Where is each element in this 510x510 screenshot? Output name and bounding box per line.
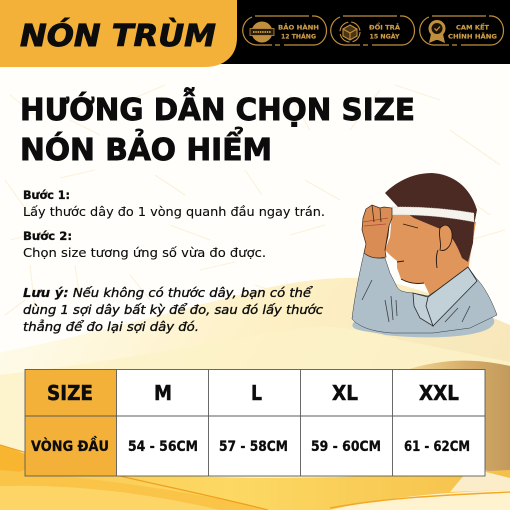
measuring tape — [392, 207, 474, 222]
row 2 labels: 57 - 58CM — [219, 439, 288, 455]
sleeve and shirt — [352, 253, 497, 333]
text block: step 1: Lấy thước dây đo 1 vòng quanh đầu ngay trán. — [23, 204, 325, 219]
row 1 labels: XL — [332, 381, 358, 405]
shirt shadow — [352, 316, 494, 337]
face lines — [397, 224, 438, 284]
text block: step 2: Bước 2: — [23, 229, 72, 243]
title: HƯỚNG DẪN CHỌN SIZE — [20, 87, 415, 128]
row 2 labels: 61 - 62CM — [404, 439, 470, 455]
logo panel — [0, 0, 237, 67]
illustration: man measuring head — [352, 173, 497, 337]
text block: note: thẳng để đo lại sợi dây đó. — [23, 319, 199, 334]
badge: authenticity — [420, 16, 504, 45]
hair — [385, 173, 477, 262]
icon: rosette — [428, 20, 446, 43]
badge: authenticity: CHÍNH HÃNG — [448, 32, 497, 40]
badge: authenticity: CAM KẾT — [456, 22, 490, 32]
ear — [439, 225, 452, 250]
hand — [362, 205, 392, 258]
skin: face and neck — [385, 212, 476, 300]
icon: return box — [340, 22, 360, 42]
text block: note: dùng 1 sợi dây bất kỳ để đo, sau đó lấy thước — [23, 302, 323, 317]
row 2 labels: 59 - 60CM — [311, 439, 381, 455]
text block: note — [23, 285, 323, 334]
badge: warranty: 12 THÁNG — [281, 32, 316, 40]
text block: step 2 — [23, 229, 266, 260]
row 1 labels: XXL — [419, 381, 459, 405]
size table — [25, 370, 485, 476]
badge: warranty: BẢO HÀNH — [278, 22, 319, 32]
badge: returns: 15 NGÀY — [370, 32, 400, 40]
text block: note: Lưu ý: Nếu không có thước dây, bạn có thể — [23, 285, 313, 300]
row 2 labels: VÒNG ĐẦU — [31, 436, 109, 455]
sleeve folds — [362, 280, 470, 322]
row 1 labels: L — [251, 381, 262, 405]
row 2 labels: 54 - 56CM — [128, 439, 198, 455]
brand name: NÓN TRÙM — [20, 17, 216, 54]
title — [20, 87, 415, 168]
row 1 labels: M — [154, 381, 172, 405]
badge: returns — [331, 16, 414, 45]
badge: warranty — [243, 16, 326, 45]
row 1 labels: SIZE — [47, 381, 93, 405]
text block: step 1 — [23, 188, 325, 219]
text block: step 1: Bước 1: — [23, 188, 70, 202]
header bar — [0, 0, 510, 67]
text block: step 2: Chọn size tương ứng số vừa đo được. — [23, 245, 266, 260]
icon: warranty seal — [250, 22, 274, 42]
size header cell — [25, 370, 116, 476]
collar — [413, 267, 477, 326]
badge: returns: ĐỔI TRẢ — [369, 22, 400, 32]
row 1 labels — [47, 381, 459, 405]
title: NÓN BẢO HIỂM — [20, 127, 272, 168]
row 2 labels — [31, 436, 470, 455]
